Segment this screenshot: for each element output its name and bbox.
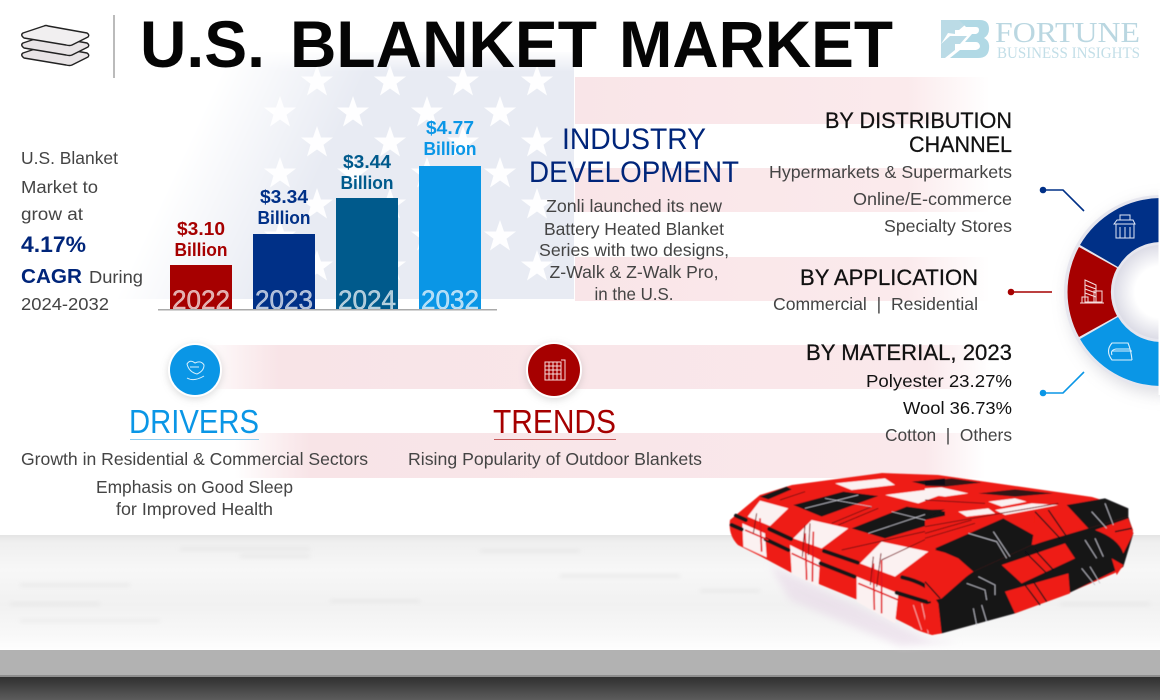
industry development: DEVELOPMENT bbox=[529, 156, 739, 189]
by distribution channel: Specialty Stores bbox=[884, 216, 1012, 236]
drivers: Emphasis on Good Sleep bbox=[96, 477, 293, 497]
text: CAGR summary: grow at bbox=[21, 204, 83, 224]
bar 2022: 2022 bbox=[172, 285, 230, 315]
by material: Wool 36.73% bbox=[903, 398, 1012, 418]
icon: buildings bbox=[1080, 280, 1104, 303]
bar 2032: $4.77 bbox=[426, 118, 474, 138]
table surface bbox=[0, 535, 1160, 700]
trends: TRENDS bbox=[493, 403, 616, 440]
text: CAGR summary: Market to bbox=[21, 177, 98, 197]
segment: material bbox=[1080, 317, 1160, 386]
by material: Cotton | Others bbox=[885, 425, 1012, 445]
bar 2024: 2024 bbox=[338, 285, 396, 315]
industry development: Series with two designs, bbox=[539, 240, 729, 260]
text: CAGR summary: During bbox=[89, 267, 143, 287]
by distribution channel bbox=[769, 108, 1012, 236]
trends bbox=[408, 342, 702, 469]
connector: distribution bbox=[1040, 188, 1084, 211]
text: CAGR summary bbox=[21, 148, 143, 314]
trends: Rising Popularity of Outdoor Blankets bbox=[408, 449, 702, 469]
icon: fabric roll bbox=[526, 342, 582, 400]
drivers bbox=[21, 343, 368, 519]
connector: material bbox=[1040, 372, 1084, 396]
icon: heart in hand bbox=[168, 343, 222, 399]
icon: folded blanket bbox=[1108, 343, 1132, 360]
connector: application bbox=[1008, 290, 1052, 294]
by material: BY MATERIAL, 2023 bbox=[806, 340, 1012, 365]
bar 2023: Billion bbox=[258, 208, 310, 228]
logo: Fortune Business Insights bbox=[941, 17, 1140, 62]
bar 2024: Billion bbox=[340, 173, 394, 193]
bar 2024 bbox=[336, 152, 398, 315]
drivers: for Improved Health bbox=[116, 499, 273, 519]
title: U.S. bbox=[140, 8, 265, 81]
icon: store bbox=[1114, 215, 1135, 238]
bar 2024: $3.44 bbox=[343, 152, 391, 172]
title bbox=[140, 8, 893, 81]
drivers: Growth in Residential & Commercial Sectors bbox=[21, 449, 368, 469]
industry development: INDUSTRY bbox=[562, 123, 706, 156]
background flag bbox=[168, 58, 968, 478]
text: CAGR summary: CAGR bbox=[21, 266, 83, 288]
industry development: Z-Walk & Z-Walk Pro, bbox=[550, 262, 718, 282]
by application: Commercial | Residential bbox=[773, 294, 978, 314]
industry development: in the U.S. bbox=[594, 284, 674, 304]
by distribution channel: BY DISTRIBUTION bbox=[825, 108, 1012, 133]
icon: stacked blankets bbox=[22, 26, 89, 66]
bar 2032: Billion bbox=[424, 139, 476, 159]
bar chart bbox=[158, 118, 497, 315]
bar 2022: $3.10 bbox=[177, 219, 225, 239]
bar 2032: 2032 bbox=[421, 285, 479, 315]
blanket left part detail bbox=[732, 478, 945, 633]
bar 2022: Billion bbox=[174, 240, 228, 260]
by application: BY APPLICATION bbox=[800, 265, 978, 290]
text: CAGR summary: 2024-2032 bbox=[21, 294, 109, 314]
by distribution channel: CHANNEL bbox=[909, 132, 1012, 157]
blanket right part detail bbox=[925, 478, 1133, 635]
by distribution channel: Online/E-commerce bbox=[853, 189, 1012, 209]
logo: Fortune Business Insights: BUSINESS INSIGHTS bbox=[997, 45, 1140, 62]
title: BLANKET bbox=[290, 8, 597, 81]
text: CAGR summary: 4.17% bbox=[21, 232, 86, 257]
industry development: Zonli launched its new bbox=[546, 196, 722, 216]
by material: Polyester 23.27% bbox=[866, 371, 1012, 391]
title: MARKET bbox=[619, 8, 893, 81]
segment: distribution bbox=[1080, 198, 1160, 267]
by application bbox=[773, 265, 978, 314]
by distribution channel: Hypermarkets & Supermarkets bbox=[769, 162, 1012, 182]
logo: Fortune Business Insights: FORTUNE bbox=[995, 17, 1140, 49]
industry development bbox=[529, 123, 739, 304]
industry development: Battery Heated Blanket bbox=[544, 219, 724, 239]
text: CAGR summary: U.S. Blanket bbox=[21, 148, 118, 168]
bar 2032 bbox=[419, 118, 481, 315]
bar 2023 bbox=[253, 187, 315, 315]
donut chart bbox=[1064, 190, 1160, 395]
divider bbox=[113, 15, 115, 78]
bar 2023: 2023 bbox=[255, 285, 313, 315]
bar 2022 bbox=[170, 219, 232, 315]
blanket photo bbox=[730, 473, 1133, 646]
bar 2023: $3.34 bbox=[260, 187, 308, 207]
segment: application bbox=[1068, 247, 1117, 337]
drivers: DRIVERS bbox=[129, 403, 259, 440]
by material bbox=[806, 340, 1012, 445]
